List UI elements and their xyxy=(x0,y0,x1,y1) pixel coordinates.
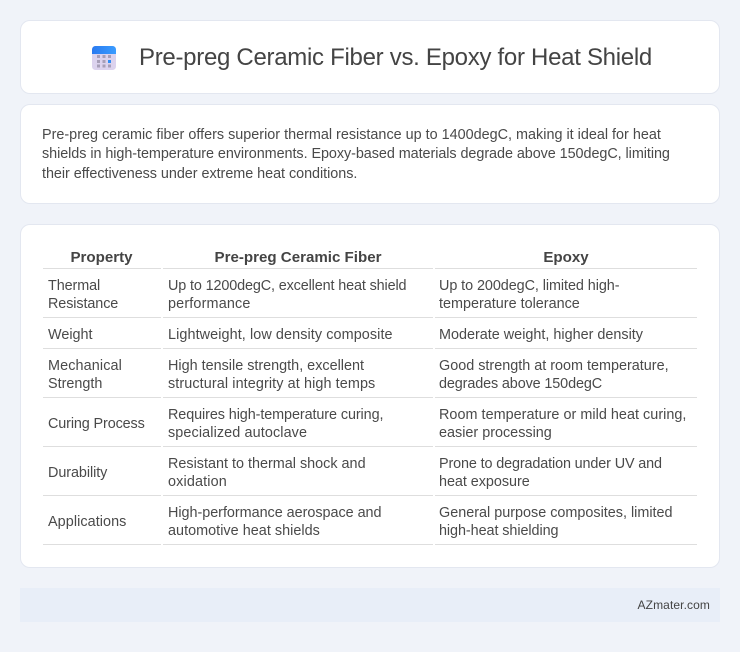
summary text: Pre-preg ceramic fiber offers superior thermal resistance up to 1400degC, making it ideal for heat xyxy=(42,127,661,143)
row: applications: automotive heat shields xyxy=(168,523,320,539)
row: mechanical strength: structural integrity at high temps xyxy=(168,376,375,392)
row: durability: Prone to degradation under UV and xyxy=(439,456,662,472)
panel: comparison table xyxy=(20,224,720,568)
row: thermal resistance: Resistance xyxy=(48,296,118,312)
row: durability: oxidation xyxy=(168,474,227,490)
summary text xyxy=(42,127,670,182)
row: weight xyxy=(48,327,643,343)
row: applications: High-performance aerospace and xyxy=(168,505,381,521)
row: applications: high-heat shielding xyxy=(439,523,558,539)
row: curing process: specialized autoclave xyxy=(168,425,307,441)
row: durability: heat exposure xyxy=(439,474,530,490)
panel: summary xyxy=(20,104,720,204)
footer brand: AZmater.com xyxy=(638,598,710,612)
table header: pre-preg ceramic fiber: Pre-preg Ceramic Fiber xyxy=(215,249,381,266)
row: mechanical strength: Good strength at room temperature, xyxy=(439,358,669,374)
table header: property: Property xyxy=(70,249,133,266)
row: durability xyxy=(48,456,662,490)
row: mechanical strength: High tensile strength, excellent xyxy=(168,358,364,374)
row: thermal resistance: performance xyxy=(168,296,251,312)
row: thermal resistance: temperature tolerance xyxy=(439,296,580,312)
row: mechanical strength: degrades above 150degC xyxy=(439,376,602,392)
row: applications: Applications xyxy=(48,514,126,530)
row: weight: Weight xyxy=(48,327,93,343)
title: Pre-preg Ceramic Fiber vs. Epoxy for Heat Shield xyxy=(139,44,652,71)
row: weight: Lightweight, low density composite xyxy=(168,327,393,343)
footer bar xyxy=(20,588,720,622)
row: curing process xyxy=(48,407,686,441)
row: durability: Durability xyxy=(48,465,107,481)
row: curing process: Requires high-temperature curing, xyxy=(168,407,383,423)
row: mechanical strength: Strength xyxy=(48,376,102,392)
row: thermal resistance: Thermal xyxy=(48,278,100,294)
row: applications: General purpose composites, limited xyxy=(439,505,673,521)
table header: epoxy: Epoxy xyxy=(543,249,589,266)
row: curing process: Room temperature or mild heat curing, xyxy=(439,407,686,423)
row: curing process: Curing Process xyxy=(48,416,145,432)
row: weight: Moderate weight, higher density xyxy=(439,327,643,343)
summary text: shields in high-temperature environments. Epoxy-based materials degrade above 150degC, limiting xyxy=(42,146,670,162)
row: mechanical strength: Mechanical xyxy=(48,358,122,374)
row: thermal resistance: Up to 1200degC, excellent heat shield xyxy=(168,278,406,294)
row: curing process: easier processing xyxy=(439,425,552,441)
row: thermal resistance xyxy=(48,278,619,312)
row: durability: Resistant to thermal shock and xyxy=(168,456,366,472)
summary text: their effectiveness under extreme heat conditions. xyxy=(42,166,357,182)
icon: calendar xyxy=(92,46,116,70)
row: applications xyxy=(48,505,673,539)
panel: header xyxy=(20,20,720,94)
row: thermal resistance: Up to 200degC, limited high- xyxy=(439,278,619,294)
row: mechanical strength xyxy=(48,358,669,392)
